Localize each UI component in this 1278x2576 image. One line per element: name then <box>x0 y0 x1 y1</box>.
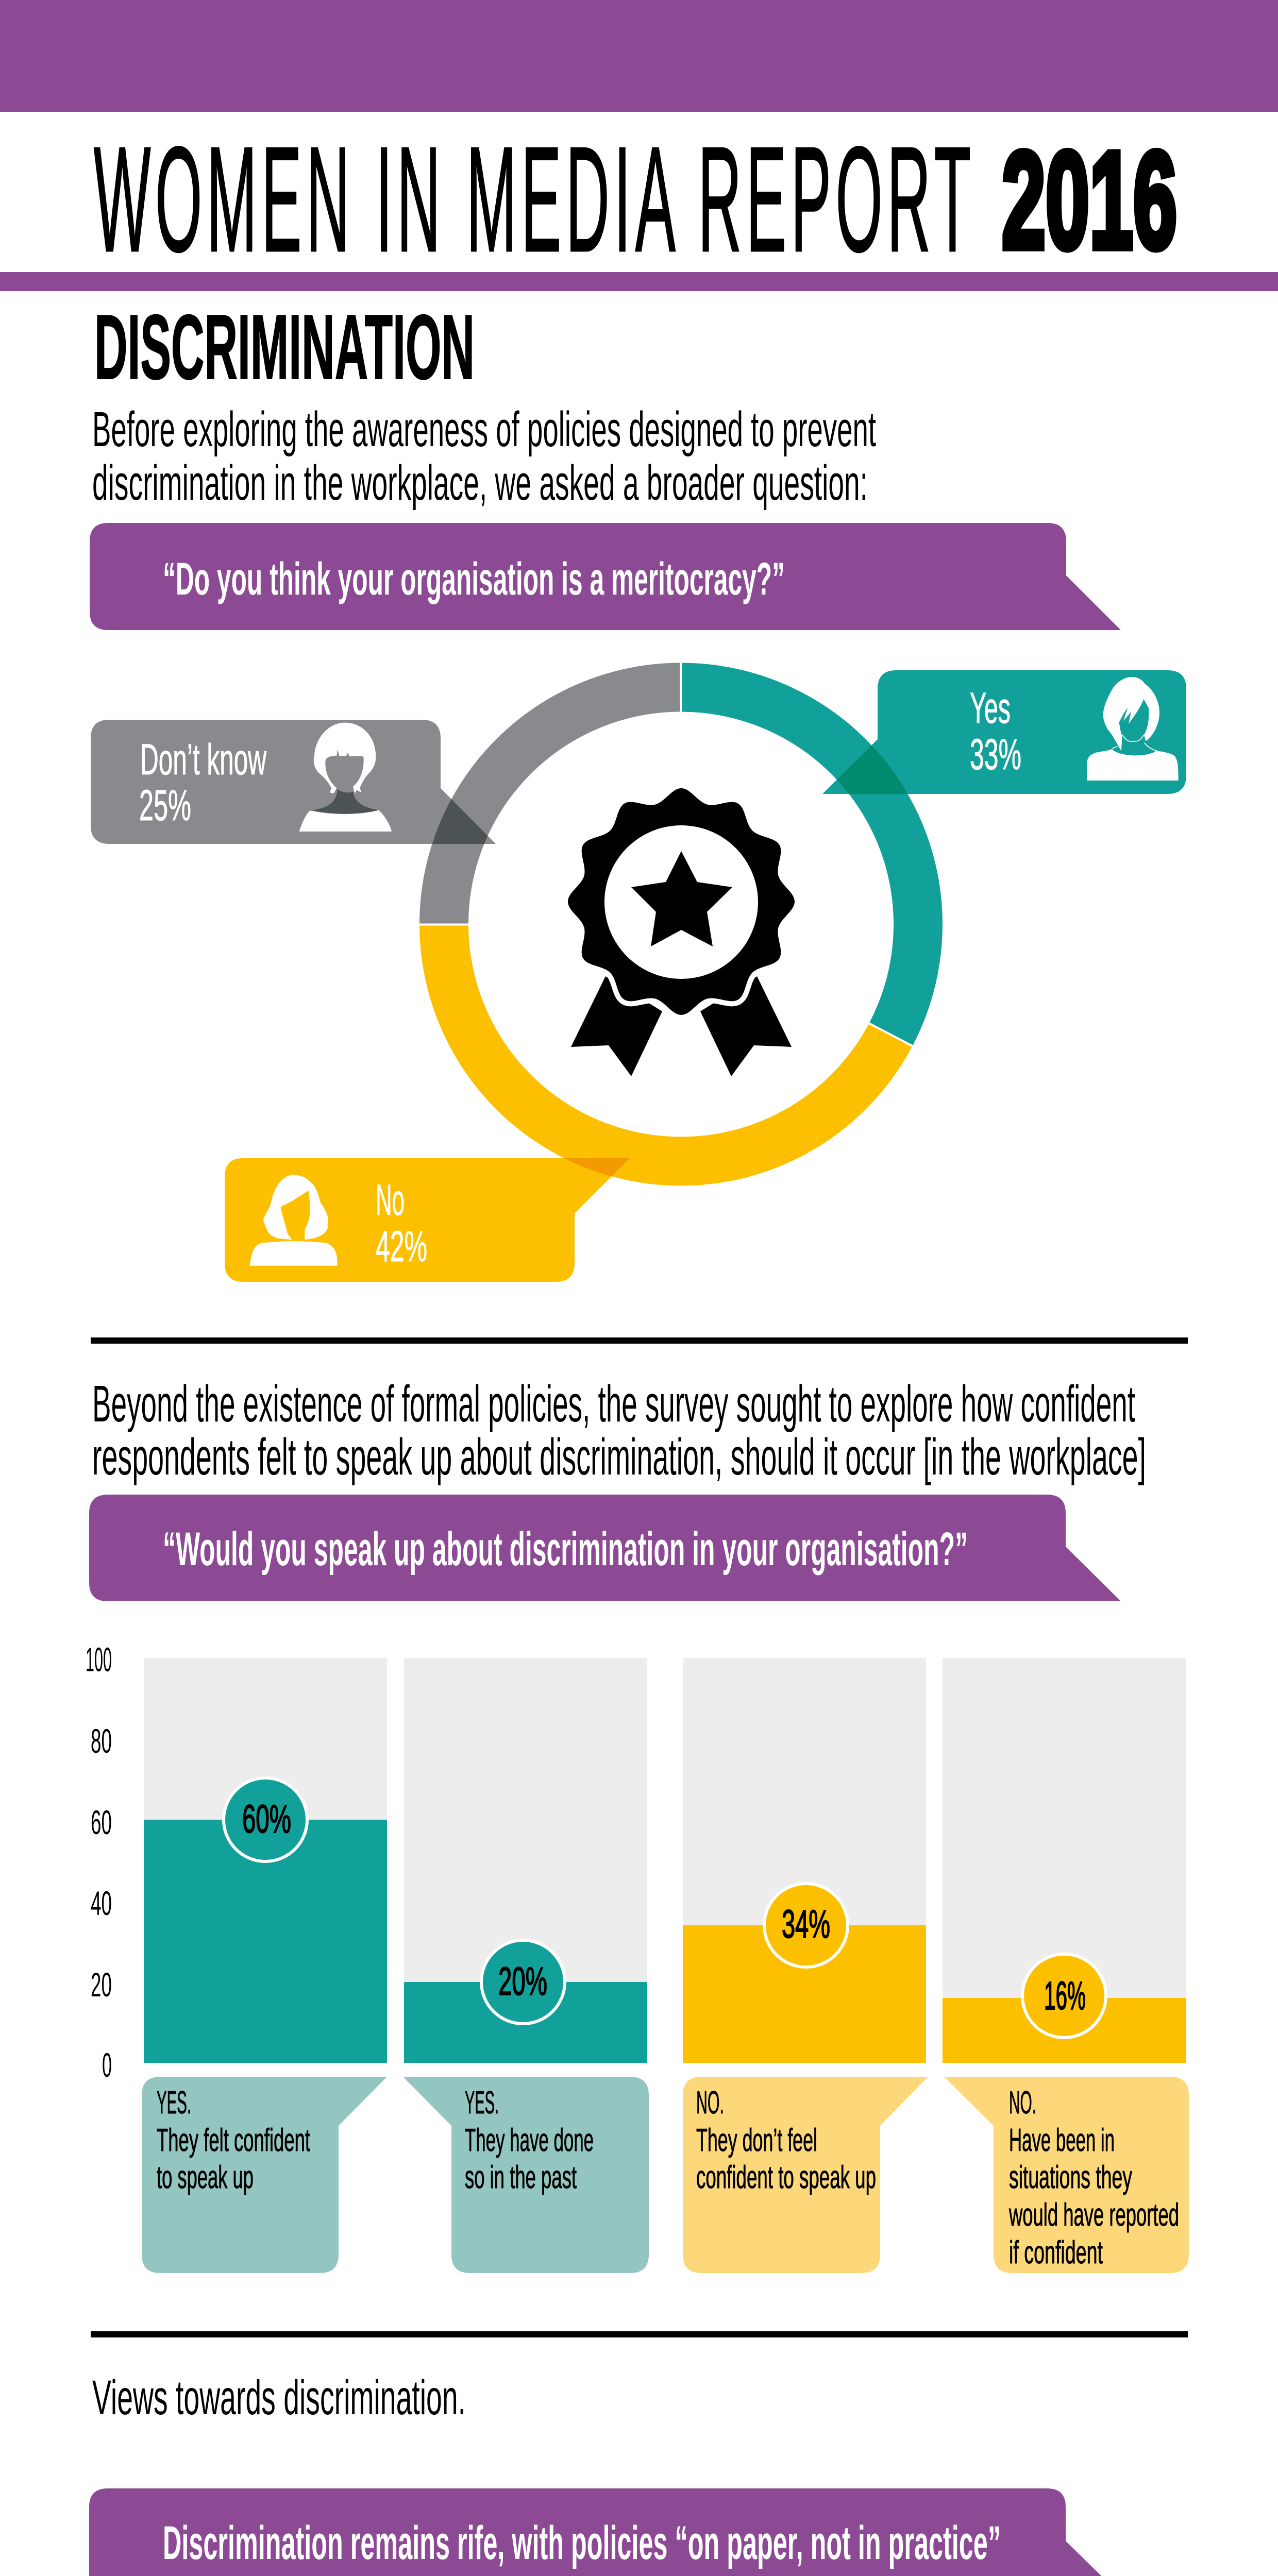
y axis labels: 0 <box>102 2046 112 2084</box>
callout: no 42%: No <box>376 1176 405 1224</box>
callout: don't know 25% <box>91 720 496 844</box>
bar chart: would you speak up <box>86 1640 1186 2084</box>
intro text: speaking up <box>92 1375 1146 1486</box>
bar: no not confident 34%: 34% <box>782 1902 830 1946</box>
callout: they have done so: so in the past <box>465 2160 577 2195</box>
callout: situations they would have reported: NO. <box>1009 2085 1036 2121</box>
callout: they don't feel confident: They don’t feel <box>696 2123 817 2158</box>
callout: no 42% <box>225 1158 630 1282</box>
bar: no not confident 34% <box>683 1658 926 2063</box>
callout: they don't feel confident: confident to speak up <box>696 2160 876 2195</box>
callout: they have done so: They have done <box>465 2123 594 2158</box>
subheading: views towards discrimination: Views towards discrimination. <box>92 2370 466 2425</box>
callout: they have done so: YES. <box>465 2085 499 2121</box>
heading: discrimination: DISCRIMINATION <box>94 296 475 398</box>
segment: don't know 25% <box>444 687 681 924</box>
segment: yes 33% <box>681 687 918 1035</box>
y axis labels: 80 <box>91 1722 112 1760</box>
y axis labels <box>86 1640 112 2084</box>
question banner: meritocracy <box>90 523 1121 630</box>
intro text <box>92 402 876 511</box>
callout: situations they would have reported <box>944 2077 1189 2273</box>
segment: no 42% <box>444 924 890 1161</box>
icon: woman silhouette <box>299 723 392 832</box>
callout: situations they would have reported: situations they <box>1009 2160 1132 2195</box>
callout: yes 33% <box>822 670 1186 794</box>
icon: woman silhouette <box>249 1175 337 1266</box>
callout: they felt confident: They felt confident <box>157 2123 310 2158</box>
y axis labels: 60 <box>91 1803 112 1841</box>
question banner: speak up <box>89 1495 1121 1601</box>
callout: yes 33%: Yes <box>970 684 1011 732</box>
callout: situations they would have reported: Have been in <box>1009 2123 1115 2158</box>
top purple band <box>0 0 1278 112</box>
question banner: meritocracy: “Do you think your organisation is a meritocracy?” <box>163 553 785 604</box>
callout: don't know 25%: 25% <box>139 781 191 829</box>
seal <box>568 788 795 1015</box>
callout: they don't feel confident: NO. <box>696 2085 724 2121</box>
ribbons <box>571 976 792 1076</box>
callout: they felt confident <box>142 2077 387 2273</box>
callout: they felt confident: YES. <box>157 2085 191 2121</box>
bar chart: would you speak up: 100 <box>86 1640 112 1679</box>
callout: yes 33%: 33% <box>970 730 1021 778</box>
callout: situations they would have reported: if confident <box>1009 2235 1103 2270</box>
y axis labels: 20 <box>91 1965 112 2004</box>
callout: they don't feel confident <box>683 2077 928 2273</box>
bar: yes confident 60% <box>144 1658 387 2063</box>
banner: discrimination remains rife <box>89 2488 1121 2576</box>
bar: no would have reported 16% <box>943 1658 1186 2063</box>
callout: they felt confident: to speak up <box>157 2160 254 2195</box>
bar: no would have reported 16%: 16% <box>1044 1974 1086 2018</box>
bar: yes confident 60%: 60% <box>242 1797 291 1841</box>
y axis labels: 40 <box>91 1884 112 1922</box>
callout: they have done so <box>403 2077 649 2273</box>
icon: award rosette <box>568 788 795 1076</box>
callout: no 42%: 42% <box>376 1222 427 1270</box>
callout: don't know 25%: Don’t know <box>140 735 266 784</box>
purple band under title <box>0 272 1278 291</box>
bar: yes done so 20%: 20% <box>498 1959 547 2004</box>
star <box>631 851 732 946</box>
bar: yes done so 20% <box>404 1658 647 2063</box>
donut chart <box>417 660 918 1161</box>
icon: woman silhouette <box>1087 677 1179 781</box>
